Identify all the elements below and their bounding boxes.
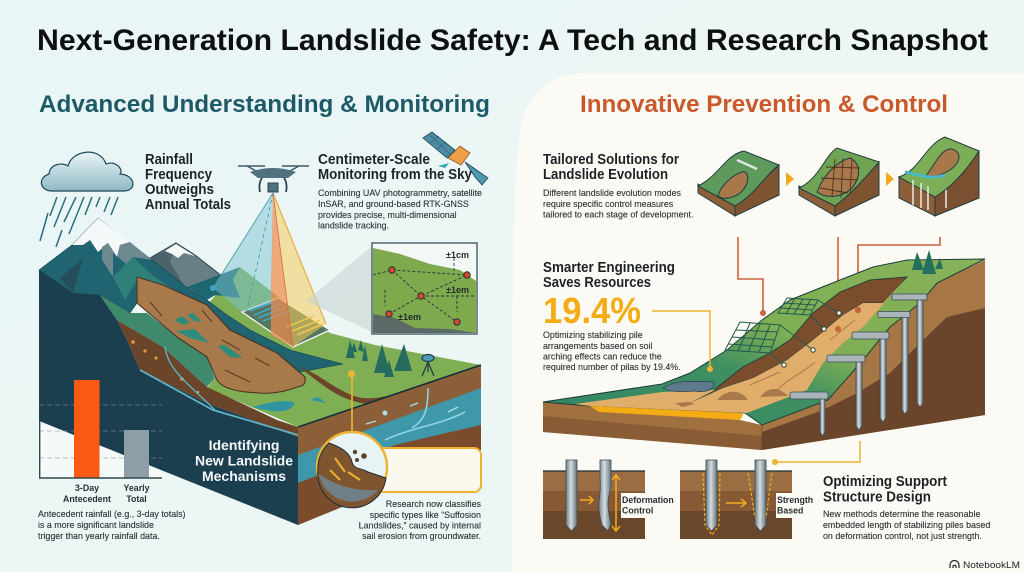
label: 3-Day Antecedent: 3-Day — [75, 483, 99, 493]
main mountain — [39, 218, 343, 372]
text: rainfall description: trigger than yearly rainfall data. — [38, 531, 160, 541]
dark cross-section block — [39, 270, 298, 525]
icon: drone — [238, 166, 309, 192]
magnifier: suffosion detail — [317, 432, 387, 508]
heading: tailored solutions: Landslide Evolution — [543, 167, 668, 183]
heading: new landslide mechanisms: Mechanisms — [202, 468, 286, 484]
text: monitoring description lines 3-4: landslide tracking. — [318, 220, 389, 230]
near ridge peak — [187, 267, 240, 300]
label: strength based: Based — [777, 506, 803, 516]
left soil face — [543, 402, 762, 450]
icon: rain cloud — [40, 152, 133, 247]
right side face soil — [298, 365, 481, 525]
connector: pointer line — [351, 374, 353, 434]
text: tailored description: require specific control measures — [543, 199, 674, 209]
label: ±1em left: ±1em — [398, 312, 421, 322]
bar chart — [39, 380, 162, 478]
right soil face — [762, 260, 985, 450]
trees — [346, 340, 412, 377]
icon: GNSS tripod — [422, 354, 434, 376]
text: monitoring description: Combining UAV photogrammetry, satellite — [318, 188, 482, 198]
heading: rainfall frequency: Outweighs — [145, 182, 214, 198]
landslide scar — [137, 277, 305, 393]
callout: empty box — [377, 448, 481, 492]
connector: slope to support design — [775, 441, 860, 462]
label: strength based: Strength — [777, 495, 813, 505]
heading: new landslide mechanisms: Identifying — [209, 437, 279, 453]
panel: deformation control — [543, 460, 674, 539]
scarp — [690, 277, 907, 403]
icon: satellite — [423, 132, 488, 185]
text: support description: New methods determine the reasonable — [823, 509, 980, 519]
panel: left terrain diagram — [39, 218, 481, 525]
heading: centimeter-scale: Centimeter-Scale — [318, 152, 430, 168]
icon: stage 3 block — [899, 137, 979, 216]
callout wedge — [306, 246, 372, 332]
sand slide — [575, 277, 907, 413]
green slope surface — [543, 259, 985, 425]
bar: yearly total — [124, 430, 149, 478]
heading: optimizing support: Optimizing Support — [823, 474, 947, 490]
arrow: stage 1 to 2 — [786, 172, 794, 186]
heading: optimizing support: Structure Design — [823, 490, 931, 506]
bar: 3-day antecedent — [74, 380, 100, 478]
heading: monitoring from the sky: Monitoring from the Sky — [318, 167, 472, 183]
label: ±1em right: ±1em — [446, 285, 469, 295]
chart background — [39, 421, 162, 478]
anchor mesh — [725, 298, 839, 365]
trees — [912, 252, 924, 270]
heading: smarter engineering — [543, 260, 675, 291]
text: engineering description: required number of pilas by 19.4%. — [543, 362, 681, 372]
heading: smarter engineering: Smarter Engineering — [543, 260, 675, 276]
label: deformation control: Deformation — [622, 495, 674, 505]
logo: NotebookLM: NotebookLM — [963, 560, 1020, 571]
heading: rainfall frequency: Annual Totals — [145, 197, 231, 213]
text: support description: embedded length of stabilizing piles based — [823, 520, 990, 530]
text: engineering description: Optimizing stabilizing pile — [543, 330, 643, 340]
connector dot — [707, 366, 713, 372]
panel: strength based — [680, 460, 813, 539]
arrow: stage 2 to 3 — [886, 172, 894, 186]
connector dots — [760, 310, 766, 316]
inset: accuracy map — [372, 243, 477, 334]
stat: 19.4%: 19.4% — [543, 290, 641, 331]
heading: rainfall frequency: Frequency — [145, 167, 212, 183]
light green surface — [207, 267, 481, 427]
label: 3-Day Antecedent: Antecedent — [63, 494, 111, 504]
label: ±1cm: ±1cm — [446, 250, 469, 260]
cross-section brown soil — [117, 320, 298, 437]
yellow toe band — [590, 406, 743, 420]
text: mechanism description: specific types like “Suffosion — [370, 510, 481, 520]
icon: dot — [348, 370, 355, 378]
icon: stage 1 block — [698, 151, 779, 216]
stabilizing piles — [820, 297, 923, 436]
panel: right background — [512, 73, 1024, 572]
anchor nodes — [782, 311, 841, 367]
connector: 19.4% to slope — [652, 311, 710, 369]
text: mechanism description: Research now classifies — [386, 499, 481, 509]
rock revetment — [663, 381, 714, 392]
heading: smarter engineering: Saves Resources — [543, 275, 651, 291]
heading: new landslide mechanisms: New Landslide — [195, 452, 293, 468]
text: rainfall description: is a more significant landslide — [38, 520, 154, 530]
heading: rainfall frequency — [145, 152, 231, 213]
label: deformation control: Control — [622, 506, 653, 516]
heading: left section: Advanced Understanding & Monitoring — [39, 91, 490, 118]
text: monitoring description line 2: InSAR, and ground-based RTK-GNSS — [318, 199, 469, 209]
connectors: stages to slope — [738, 237, 940, 329]
panel: large slope diagram — [543, 250, 985, 450]
icon: stage 2 block — [799, 148, 879, 216]
text: mechanism description: Landslides,” caused by internal — [359, 520, 481, 530]
heading: rainfall frequency: Rainfall — [145, 152, 193, 168]
heading: tailored solutions: Tailored Solutions for — [543, 152, 679, 168]
text: support description: on deformation control, not just strength. — [823, 531, 982, 541]
icon: sensing beams — [210, 193, 326, 347]
green wedge — [100, 295, 215, 387]
label: Yearly Total: Total — [126, 494, 147, 504]
heading: optimizing support — [823, 474, 947, 506]
text: rainfall description: Antecedent rainfall (e.g., 3-day totals) — [38, 509, 186, 519]
survey grid on ground — [242, 298, 330, 347]
text: engineering description: arching effects can reduce the — [543, 352, 662, 362]
text: tailored description: tailored to each stage of development. — [543, 210, 693, 220]
far mountain — [150, 243, 240, 300]
connector dot — [772, 459, 778, 465]
stream and ponds — [300, 367, 397, 405]
label: Yearly Total: Yearly — [124, 483, 149, 493]
text: engineering description: arrangements based on soil — [543, 341, 653, 351]
text: mechanism description: sail erosion from groundwater. — [362, 531, 481, 541]
title: Next-Generation Landslide Safety: A Tech and Research Snapshot — [37, 24, 988, 57]
text: tailored description: Different landslide evolution modes — [543, 188, 681, 198]
heading: right section: Innovative Prevention & Control — [580, 91, 948, 118]
text: monitoring description lines 3-4: provides precise, multi-dimensional — [318, 210, 457, 220]
heading: tailored solutions — [543, 152, 679, 183]
